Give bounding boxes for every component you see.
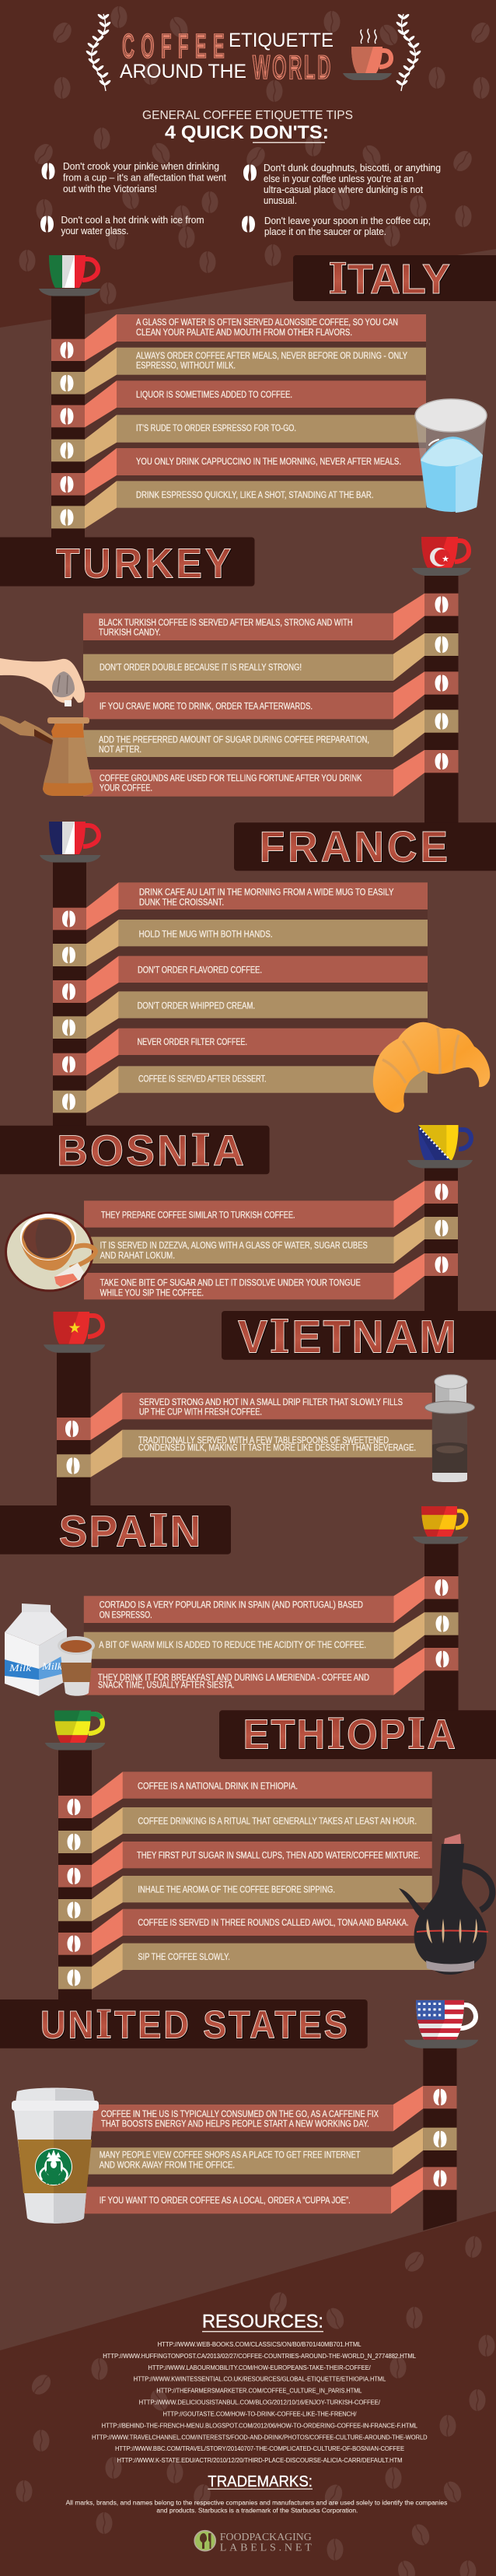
Italy tip 1 xyxy=(51,314,426,361)
US tip 3 xyxy=(78,2167,457,2213)
resources list: HTTP://WWW.TRAVELCHANNEL.COM/INTERESTS/FOOD-AND-DRINK/PHOTOS/COFFEE-CULTURE-AROUND-THE-WORLD xyxy=(92,2433,428,2441)
tip: spoon xyxy=(242,216,431,237)
France tip 3: DON'T ORDER FLAVORED COFFEE. xyxy=(138,966,262,976)
Spain tip 3: SNACK TIME, USUALLY AFTER SIESTA. xyxy=(98,1681,235,1691)
icon: cup on saucer from above xyxy=(6,1213,96,1291)
Ethiopia tip 4 xyxy=(58,1876,432,1921)
tip: pinkie: out with the Victorians! xyxy=(63,184,157,195)
icon: Turkey flag cup: ★ xyxy=(442,554,449,564)
heading: 4 quick don'ts: 4 QUICK DON'TS: xyxy=(165,122,329,143)
icon: Ethiopia flag cup xyxy=(45,1710,105,1751)
Turkey tip 4 xyxy=(83,710,459,757)
Turkey tip 1: TURKISH CANDY. xyxy=(99,629,161,638)
icon: milk carton: Milk xyxy=(41,1660,62,1672)
Bosnia heading bar xyxy=(0,1126,270,1174)
trademarks text xyxy=(66,2499,447,2514)
Italy tip 5 xyxy=(51,448,426,496)
US tip 3: IF YOU WANT TO ORDER COFFEE AS A LOCAL, ORDER A “CUPPA JOE”. xyxy=(100,2196,351,2206)
Italy tip 4 xyxy=(51,415,426,461)
France tip 4: DON'T ORDER WHIPPED CREAM. xyxy=(138,1002,255,1011)
resources list: HTTP://WWW.LABOURMOBILITY.COM/HOW-EUROPEANS-TAKE-THEIR-COFFEE/ xyxy=(148,2364,371,2371)
icon: croissant xyxy=(373,1022,490,1113)
US tip 2: AND WORK AWAY FROM THE OFFICE. xyxy=(100,2161,235,2170)
Turkey tip 3 xyxy=(83,671,459,719)
logo: food packaging labels: FOODPACKAGING xyxy=(220,2532,312,2543)
France tip 1 xyxy=(53,882,428,930)
logo: food packaging labels: LABELS.NET xyxy=(220,2542,312,2553)
Vietnam tip 1: SERVED STRONG AND HOT IN A SMALL DRIP FILTER THAT SLOWLY FILLS xyxy=(139,1398,403,1407)
panel: Spain xyxy=(0,1505,468,1712)
tip: dunking xyxy=(243,163,441,206)
US tip 2 xyxy=(78,2128,457,2175)
France tip 4 xyxy=(53,991,428,1039)
Ethiopia tip 6 xyxy=(58,1943,432,1989)
resources list: HTTP://GOUTASTE.COM/HOW-TO-DRINK-COFFEE-LIKE-THE-FRENCH/ xyxy=(163,2410,357,2417)
Turkey tip 5: YOUR COFFEE. xyxy=(100,784,152,794)
Spain heading: SPAIN xyxy=(59,1505,202,1558)
resources heading: RESOURCES: xyxy=(202,2311,323,2332)
Italy tip 1: A GLASS OF WATER IS OFTEN SERVED ALONGSIDE COFFEE, SO YOU CAN xyxy=(136,318,398,328)
Ethiopia tip 5: COFFEE IS SERVED IN THREE ROUNDS CALLED AWOL, TONA AND BARAKA. xyxy=(138,1919,409,1928)
resources list: HTTP://WWW.HUFFINGTONPOST.CA/2013/02/27/COFFEE-COUNTRIES-AROUND-THE-WORLD_N_2774882.HTML xyxy=(103,2352,416,2360)
Ethiopia heading: ETHIOPIA xyxy=(243,1709,457,1758)
icon: Starbucks to-go cup xyxy=(12,2088,99,2224)
France tip 5 xyxy=(53,1029,428,1075)
icon: Vietnam flag cup xyxy=(44,1312,105,1353)
Spain tip 2: A BIT OF WARM MILK IS ADDED TO REDUCE THE ACIDITY OF THE COFFEE. xyxy=(99,1641,366,1650)
Turkey tip 4: ADD THE PREFERRED AMOUNT OF SUGAR DURING COFFEE PREPARATION, xyxy=(99,735,369,745)
US tip 1 xyxy=(78,2086,457,2131)
Spain heading bar xyxy=(0,1505,231,1554)
logo: food packaging labels xyxy=(194,2531,312,2553)
panel: Bosnia xyxy=(0,1125,473,1313)
icon: right laurel xyxy=(396,13,421,91)
Bosnia tip 1: THEY PREPARE COFFEE SIMILAR TO TURKISH COFFEE. xyxy=(101,1211,295,1221)
Spain tip 2 xyxy=(84,1612,459,1659)
icon: Bosnia flag cup xyxy=(407,1125,473,1169)
Turkey tip 5: COFFEE GROUNDS ARE USED FOR TELLING FORTUNE AFTER YOU DRINK xyxy=(100,774,362,783)
resources list: HTTP://WWW.WEB-BOOKS.COM/CLASSICS/ON/B0/B701/40MB701.HTML xyxy=(158,2340,362,2348)
title words: around the: AROUND THE xyxy=(120,61,246,82)
Vietnam tip 1 xyxy=(57,1393,432,1440)
US heading: UNITED STATES xyxy=(40,2001,350,2048)
Spain tip 3 xyxy=(84,1648,459,1695)
trademarks text: and products. Starbucks is a trademark of the Starbucks Corporation. xyxy=(156,2506,358,2514)
France tip 5: NEVER ORDER FILTER COFFEE. xyxy=(138,1038,247,1047)
Bosnia tip 1 xyxy=(84,1181,458,1228)
Turkey tip 3: IF YOU CRAVE MORE TO DRINK, ORDER TEA AFTERWARDS. xyxy=(100,703,313,712)
Italy tip 2: ALWAYS ORDER COFFEE AFTER MEALS, NEVER BEFORE OR DURING - ONLY xyxy=(136,352,407,361)
tip: pinkie: Don't crook your pinkie when drinking xyxy=(63,161,219,172)
icon: Spain flag cup xyxy=(413,1506,468,1544)
Spain tip 1: CORTADO IS A VERY POPULAR DRINK IN SPAIN (AND PORTUGAL) BASED xyxy=(100,1601,363,1610)
resources list xyxy=(92,2340,428,2464)
US tip 2: MANY PEOPLE VIEW COFFEE SHOPS AS A PLACE TO GET FREE INTERNET xyxy=(100,2151,360,2161)
Italy heading bar xyxy=(293,255,496,301)
Italy tip 6 xyxy=(51,481,426,528)
Bosnia tip 3 xyxy=(84,1253,458,1299)
Bosnia tip 2 xyxy=(84,1217,458,1263)
Spain tip 1 xyxy=(84,1576,459,1623)
Ethiopia heading bar xyxy=(219,1710,496,1759)
Turkey tip 5 xyxy=(83,750,459,797)
France tip 6 xyxy=(53,1066,428,1113)
tip: dunking: ultra-casual place where dunking is not xyxy=(264,184,423,195)
France tip 2 xyxy=(53,920,428,966)
France tip 1: DRINK CAFE AU LAIT IN THE MORNING FROM A WIDE MUG TO EASILY xyxy=(139,888,394,898)
Italy tip 2 xyxy=(51,348,426,394)
title word: coffee: COFFEE xyxy=(122,28,231,65)
Vietnam tip 2 xyxy=(57,1430,432,1477)
Vietnam tip 2: TRADITIONALLY SERVED WITH A FEW TABLESPOONS OF SWEETENED xyxy=(138,1436,389,1446)
icon: Italy flag cup xyxy=(39,255,100,296)
Italy tip 6: DRINK ESPRESSO QUICKLY, LIKE A SHOT, STANDING AT THE BAR. xyxy=(136,491,373,500)
icon: glass of water xyxy=(415,399,487,513)
panel: Italy xyxy=(39,254,496,538)
icon: milk carton xyxy=(5,1603,67,1696)
tip: dunking: Don't dunk doughnuts, biscotti, or anything xyxy=(264,163,441,173)
US heading bar xyxy=(0,1999,368,2049)
panel: United States xyxy=(0,1999,478,2231)
tip: dunking: unusual. xyxy=(264,195,297,206)
US tip 1: COFFEE IN THE US IS TYPICALLY CONSUMED ON THE GO, AS A CAFFEINE FIX xyxy=(101,2110,379,2119)
Italy tip 4: IT'S RUDE TO ORDER ESPRESSO FOR TO-GO. xyxy=(136,424,296,433)
France heading bar xyxy=(234,822,496,871)
title word: etiquette: ETIQUETTE xyxy=(229,30,334,51)
Vietnam tip 2: CONDENSED MILK, MAKING IT TASTE MORE LIKE DESSERT THAN BEVERAGE. xyxy=(138,1444,416,1453)
Italy tip 5: YOU ONLY DRINK CAPPUCCINO IN THE MORNING, NEVER AFTER MEALS. xyxy=(136,457,401,467)
tip: ice: Don't cool a hot drink with ice from xyxy=(61,215,204,226)
Bosnia tip 2: IT IS SERVED IN DZEZVA, ALONG WITH A GLASS OF WATER, SUGAR CUBES xyxy=(100,1242,368,1251)
US tip 1: THAT BOOSTS ENERGY AND HELPS PEOPLE START A NEW WORKING DAY. xyxy=(101,2120,369,2129)
icon: cortado to-go cup xyxy=(58,1636,95,1696)
resources list: HTTP://THEFARMERSMARKETER.COM/COFFEE_CULTURE_IN_PARIS.HTML xyxy=(156,2387,362,2395)
France tip 1: DUNK THE CROISSANT. xyxy=(139,898,224,907)
tip: ice: your water glass. xyxy=(61,226,129,237)
France tip 3 xyxy=(53,956,428,1003)
icon: US flag cup xyxy=(404,2000,478,2049)
Bosnia tip 2: AND RAHAT LOKUM. xyxy=(100,1251,175,1260)
Turkey tip 2 xyxy=(83,633,459,681)
icon: Turkey flag cup xyxy=(412,537,471,576)
trademarks heading: TRADEMARKS: xyxy=(208,2473,313,2490)
Bosnia tip 3: WHILE YOU SIP THE COFFEE. xyxy=(100,1288,204,1298)
Bosnia heading: BOSNIA xyxy=(57,1125,246,1176)
Turkey tip 2: DON'T ORDER DOUBLE BECAUSE IT IS REALLY STRONG! xyxy=(100,664,302,673)
Italy heading: ITALY xyxy=(328,254,450,303)
icon: cezve coffee pot xyxy=(0,716,93,796)
tip: ice xyxy=(40,215,204,237)
resources list: HTTP://WWW.KWINTESSENTIAL.CO.UK/RESOURCES/GLOBAL-ETIQUETTE/ETHIOPIA.HTML xyxy=(134,2375,386,2383)
panel: Vietnam xyxy=(44,1310,496,1507)
France tip 2: HOLD THE MUG WITH BOTH HANDS. xyxy=(139,930,273,939)
Bosnia tip 3: TAKE ONE BITE OF SUGAR AND LET IT DISSOLVE UNDER YOUR TONGUE xyxy=(100,1279,361,1288)
tip: dunking: else in your coffee unless you're at an xyxy=(264,173,414,184)
Vietnam heading: VIETNAM xyxy=(238,1310,458,1363)
tip: pinkie: from a cup – it's an affectation that went xyxy=(63,173,226,184)
title block xyxy=(86,13,421,91)
resources list: HTTP://WWW.K-STATE.EDU/ACTR/2010/12/20/THIRD-PLACE-DISCOURSE-ALICIA-CARR/DEFAULT.HTM xyxy=(117,2456,403,2464)
tip: pinkie xyxy=(42,161,226,195)
Turkey tip 4: NOT AFTER. xyxy=(99,745,141,755)
title word: world: WORLD xyxy=(253,50,333,86)
Italy tip 1: CLEAN YOUR PALATE AND MOUTH FROM OTHER FLAVORS. xyxy=(136,328,352,338)
tip: spoon: Don't leave your spoon in the coffee cup; xyxy=(264,216,431,226)
Ethiopia tip 4: INHALE THE AROMA OF THE COFFEE BEFORE SIPPING. xyxy=(138,1886,335,1895)
Ethiopia tip 1: COFFEE IS A NATIONAL DRINK IN ETHIOPIA. xyxy=(138,1782,298,1792)
resources list: HTTP://WWW.DELICIOUSISTANBUL.COM/BLOG/2012/10/16/ENJOY-TURKISH-COFFEE/ xyxy=(139,2398,381,2406)
panel: Ethiopia xyxy=(45,1709,496,2001)
Turkey heading: TURKEY xyxy=(56,540,234,587)
Vietnam tip 1: UP THE CUP WITH FRESH COFFEE. xyxy=(139,1408,262,1418)
Italy tip 3 xyxy=(51,380,426,427)
trademarks text: All marks, brands, and names belong to the respective companies and manufacturers and are used solely to identify the companies xyxy=(66,2499,447,2507)
Ethiopia tip 2: COFFEE DRINKING IS A RITUAL THAT GENERALLY TAKES AT LEAST AN HOUR. xyxy=(138,1817,417,1827)
resources list: HTTP://BEHIND-THE-FRENCH-MENU.BLOGSPOT.COM/2012/06/HOW-TO-ORDERING-COFFEE-IN-FRANCE-F.HTML xyxy=(102,2421,417,2429)
Ethiopia tip 3 xyxy=(58,1842,432,1887)
tip: spoon: place it on the saucer or plate. xyxy=(264,226,386,237)
icon: jebena coffee pot xyxy=(399,1834,492,1975)
Spain tip 3: THEY DRINK IT FOR BREAKFAST AND DURING LA MERIENDA - COFFEE AND xyxy=(98,1674,369,1683)
Turkey heading bar xyxy=(0,537,255,587)
Ethiopia tip 6: SIP THE COFFEE SLOWLY. xyxy=(138,1953,230,1962)
icon: steaming coffee cup xyxy=(343,29,392,80)
icon: milk carton: Milk xyxy=(9,1662,31,1674)
Ethiopia tip 3: THEY FIRST PUT SUGAR IN SMALL CUPS, THEN ADD WATER/COFFEE MIXTURE. xyxy=(137,1852,421,1861)
Turkey tip 1 xyxy=(83,594,459,640)
icon: Vietnam flag cup: ★ xyxy=(68,1320,82,1337)
Spain tip 1: ON ESPRESSO. xyxy=(100,1610,152,1620)
Ethiopia tip 2 xyxy=(58,1807,432,1853)
Italy tip 2: ESPRESSO, WITHOUT MILK. xyxy=(136,362,236,371)
panel: Turkey xyxy=(0,537,471,824)
Turkey tip 1: BLACK TURKISH COFFEE IS SERVED AFTER MEALS, STRONG AND WITH xyxy=(99,619,353,628)
panel: France xyxy=(40,822,496,1127)
heading: general coffee etiquette tips: GENERAL COFFEE ETIQUETTE TIPS xyxy=(142,109,353,122)
Italy tip 3: LIQUOR IS SOMETIMES ADDED TO COFFEE. xyxy=(136,391,292,400)
Ethiopia tip 5 xyxy=(58,1909,432,1955)
resources list: HTTP://WWW.BBC.COM/TRAVEL/STORY/20140707-THE-COMPLICATED-CULTURE-OF-BOSNIAN-COFFEE xyxy=(115,2445,404,2452)
icon: drip filter glass xyxy=(424,1375,474,1482)
Ethiopia tip 1 xyxy=(58,1772,432,1818)
France heading: FRANCE xyxy=(260,822,451,871)
France tip 6: COFFEE IS SERVED AFTER DESSERT. xyxy=(138,1074,266,1084)
icon: France flag cup xyxy=(40,822,100,862)
icon: left laurel xyxy=(86,13,111,91)
Vietnam heading bar xyxy=(222,1311,496,1360)
icon: hand dropping sugar xyxy=(0,658,85,706)
